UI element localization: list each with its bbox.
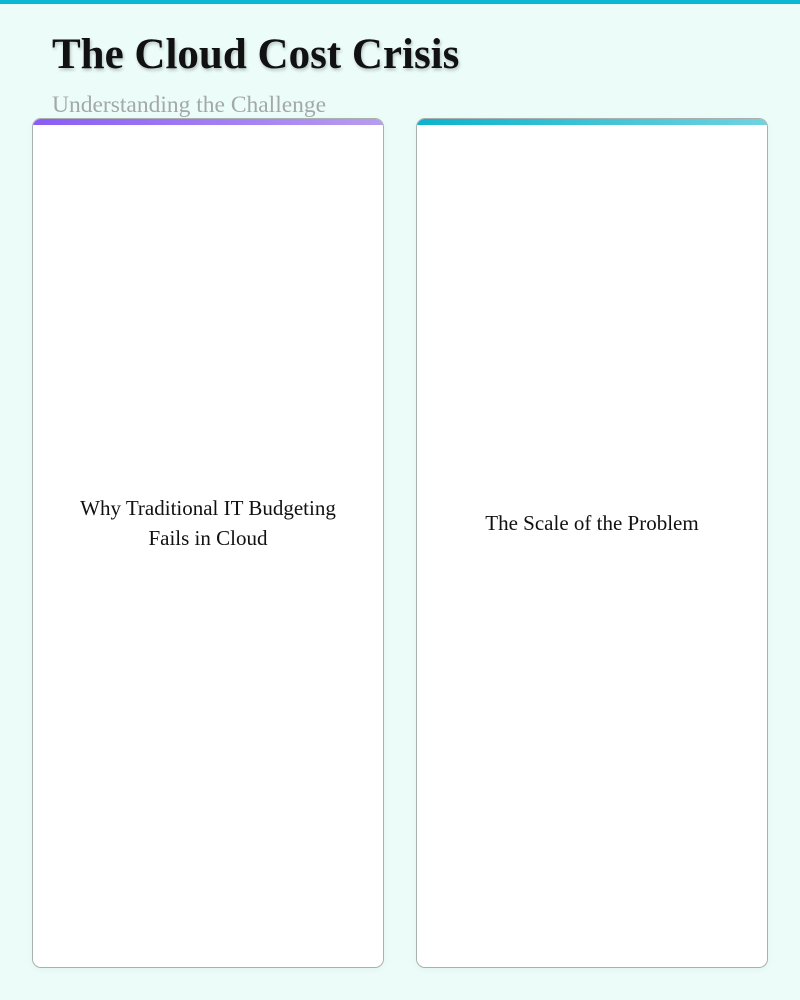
panel heading: scale of problem: The Scale of the Problem — [485, 511, 699, 535]
panel heading: traditional budgeting: Fails in Cloud — [148, 526, 268, 550]
subtitle: Understanding the Challenge — [52, 92, 326, 118]
panel heading: traditional budgeting — [80, 496, 336, 550]
panel heading: traditional budgeting: Why Traditional IT Budgeting — [80, 496, 336, 520]
panel: scale of the problem — [416, 118, 768, 968]
panel: traditional budgeting — [32, 118, 384, 968]
title: The Cloud Cost Crisis — [52, 31, 459, 78]
